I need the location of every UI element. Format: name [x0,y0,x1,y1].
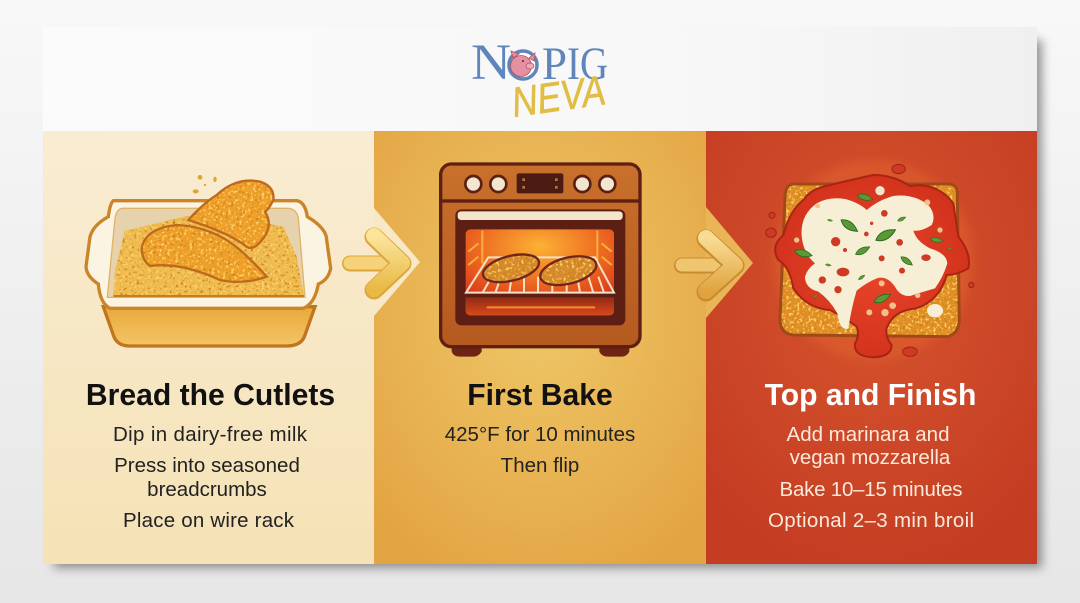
arrow: step 2 to step 3 [682,238,735,292]
crumb flecks [193,175,217,193]
breadcrumb edge [113,293,304,299]
oven door [455,209,625,325]
panel: first bake background [374,131,706,564]
text block: bread the cutlets: Place on wire rack [123,509,295,532]
sauce dots [766,164,974,356]
dish rim [86,201,331,308]
text block: top and finish [765,379,976,532]
oven feet [452,343,629,357]
oven window [466,229,614,315]
chevron: step 1 into step 2 [374,208,420,316]
baked cutlets [480,249,599,290]
text block: bread the cutlets: breadcrumbs [147,478,267,501]
text block: top and finish: Optional 2–3 min broil [768,509,974,532]
arrow: step 1 to step 2 [350,236,402,290]
heading: first bake: First Bake [467,379,613,412]
text block: bread the cutlets: Dip in dairy-free milk [113,423,308,446]
text block: top and finish: Add marinara and [787,423,949,446]
lower element [466,293,614,297]
text block: top and finish: vegan mozzarella [790,446,951,469]
wire rack [466,257,614,293]
breadcrumbs [113,216,304,296]
dish inner well [107,208,305,297]
text block: first bake: Then flip [501,454,579,477]
logo wordmark: No Pig: N [471,35,511,91]
text block: first bake: 425°F for 10 minutes [445,423,635,446]
front cutlet [142,225,267,282]
display [517,173,563,193]
marinara sauce [775,175,969,357]
cheese and crumb specks on sauce [794,186,943,316]
icon: oven with cutlets [441,164,640,357]
knobs [465,176,615,192]
control panel divider [441,199,640,203]
text block: bread the cutlets [86,379,335,532]
text block: top and finish: Bake 10–15 minutes [780,478,962,501]
text block: bread the cutlets: Press into seasoned [114,454,300,477]
dish body [103,307,315,346]
heading: top and finish: Top and Finish [765,379,976,412]
panel: bread the cutlets background [43,131,374,564]
logo wordmark: No Pig: P [542,38,567,90]
chevron: step 2 into step 3 [706,207,753,318]
oven body [441,164,640,347]
icon: breaded cutlet with marinara and mozzarella [766,160,974,360]
breaded base [780,184,959,337]
logo wordmark: No Pig [471,35,608,91]
logo pig badge [509,51,537,79]
door handle [458,211,623,220]
heading: bread the cutlets: Bread the Cutlets [86,379,335,412]
lower window glow [466,297,614,315]
heating accents [468,231,612,265]
logo: No Pig Neva [471,35,608,126]
back cutlet [188,181,273,248]
header band [43,27,1037,131]
logo wordmark: Neva: NEVA [509,66,608,126]
logo wordmark: No Pig: IG [567,38,608,90]
cheese blob [927,304,943,317]
text block: first bake [445,379,635,477]
melted mozzarella [802,196,947,329]
panel: top and finish background [706,131,1037,564]
icon: baking dish with breaded cutlets [86,175,331,346]
sauce glow [773,160,973,360]
basil leaves [794,192,953,305]
